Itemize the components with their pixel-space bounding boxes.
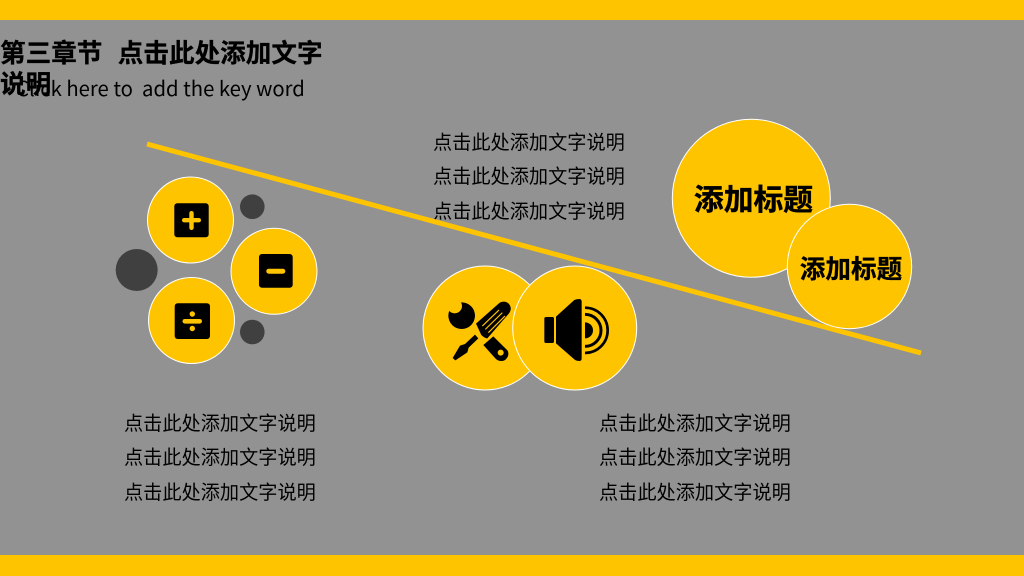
text block: bottom left: 点击此处添加文字说明 (124, 408, 316, 436)
screwdriver shaft (453, 335, 478, 360)
icon: tools (423, 266, 547, 390)
text block: top center: 点击此处添加文字说明 (433, 196, 625, 224)
text block: bottom left: 点击此处添加文字说明 (124, 442, 316, 470)
icon: speaker (513, 266, 637, 390)
bottom bar (0, 555, 1024, 576)
dark dot: lower (240, 320, 265, 344)
circle: large title (672, 119, 830, 277)
text block: bottom right: 点击此处添加文字说明 (599, 476, 791, 504)
icon: plus (148, 177, 234, 263)
diagonal line (147, 144, 921, 353)
text block: bottom left (124, 408, 316, 504)
text block: bottom right: 点击此处添加文字说明 (599, 442, 791, 470)
text block: top center: 点击此处添加文字说明 (433, 161, 625, 189)
subtitle: Click here to add the key word (16, 72, 305, 102)
text block: bottom left: 点击此处添加文字说明 (124, 476, 316, 504)
text block: top center (433, 126, 625, 224)
wrench shank (483, 336, 508, 361)
circle: large title: 添加标题 (694, 175, 813, 219)
circle: small title: 添加标题 (800, 249, 902, 286)
dark dot: large (116, 249, 158, 291)
text block: bottom right: 点击此处添加文字说明 (599, 408, 791, 436)
screwdriver handle (476, 302, 511, 338)
title: 第三章节 点击此处添加文字 说明 (0, 33, 323, 101)
icon: minus (231, 228, 317, 314)
wrench head (448, 302, 475, 329)
dark dot: upper (240, 194, 265, 219)
top bar (0, 0, 1024, 20)
icon: divide (148, 278, 234, 364)
circle: small title (787, 204, 912, 329)
text block: top center: 点击此处添加文字说明 (433, 126, 625, 154)
text block: bottom right (599, 408, 791, 504)
